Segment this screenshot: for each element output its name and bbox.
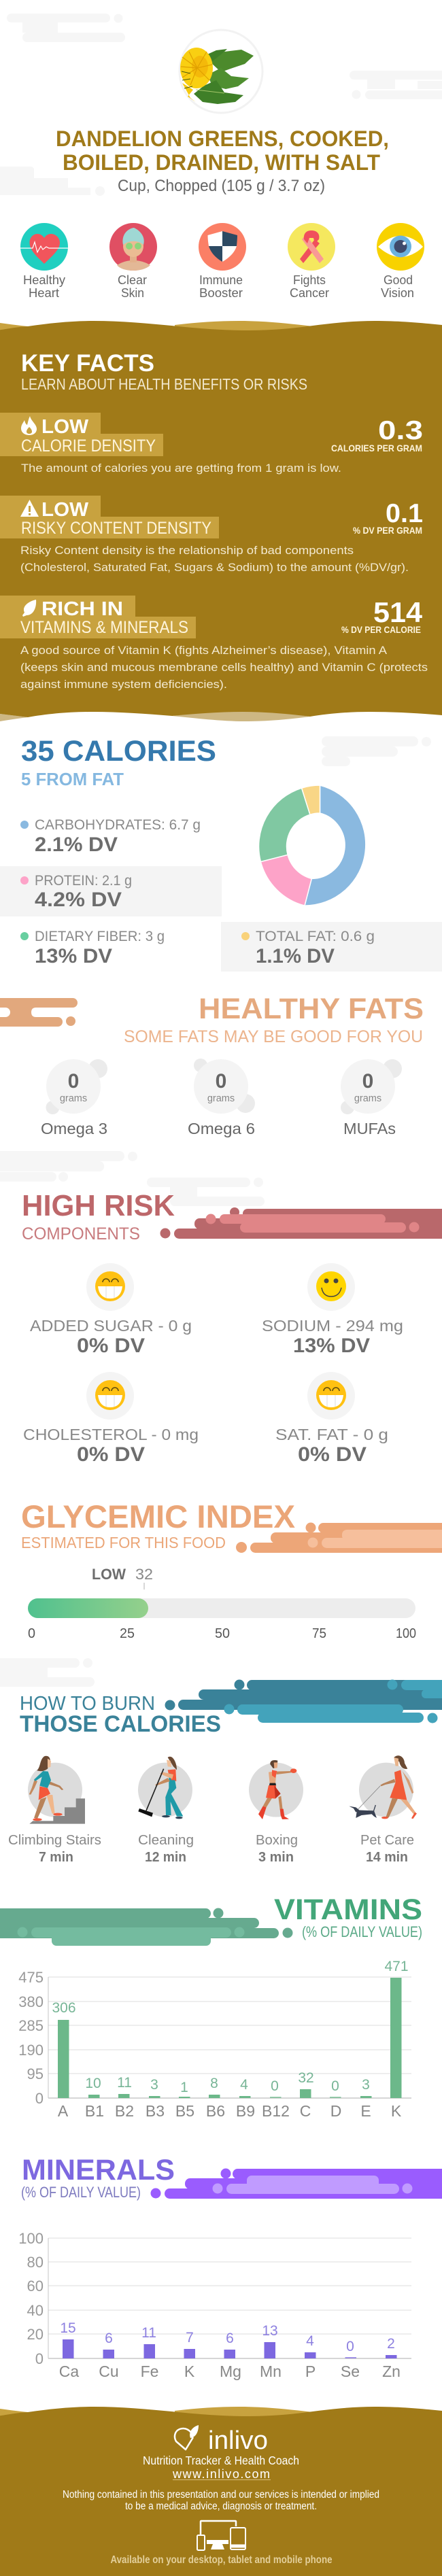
stat: omega 3: 0: [68, 1070, 79, 1093]
icon: clear skin: [109, 223, 157, 271]
gauge: glycemic index: 0: [28, 1626, 35, 1641]
bar chart: minerals: 15: [60, 2320, 76, 2336]
bar chart: vitamins: D: [330, 2102, 341, 2120]
bar chart: vitamins: B9: [236, 2102, 255, 2120]
label: healthy heart: Healthy: [23, 273, 65, 287]
activity: pet care: [349, 1755, 417, 1865]
bar chart: minerals: 80: [27, 2254, 44, 2271]
fact: low risky content density: RISKY CONTENT DENSITY: [21, 519, 211, 538]
heading: healthy fats: [124, 993, 424, 1046]
label: immune booster: Booster: [199, 286, 243, 300]
stat: omega 6: Omega 6: [188, 1120, 255, 1137]
legend: protein: 4.2% DV: [35, 889, 122, 911]
heading: how to burn those calories: HOW TO BURN: [20, 1693, 155, 1715]
fact: low calorie density: CALORIES PER GRAM: [331, 443, 422, 453]
label: good vision: [381, 273, 414, 300]
legend: protein: [0, 866, 222, 916]
fact: low risky content density: Risky Content density is the relationship of bad components: [20, 544, 354, 557]
bar chart: vitamins: 32: [298, 2070, 314, 2086]
legend: total fat: 1.1% DV: [256, 945, 335, 967]
bar chart: vitamins: 0: [271, 2078, 279, 2094]
fact: rich in vitamins and minerals: VITAMINS & MINERALS: [20, 618, 188, 637]
bar chart: vitamins: B5: [175, 2102, 194, 2120]
bar chart: vitamins: [18, 1959, 411, 2120]
icon: flame: [21, 416, 37, 435]
fact: low risky content density: LOW: [41, 499, 89, 521]
gauge: glycemic index: 32: [135, 1566, 153, 1583]
label: clear skin: Clear: [118, 273, 147, 287]
bar chart: vitamins: B6: [206, 2102, 225, 2120]
stat: omega 3: grams: [60, 1093, 87, 1104]
bar chart: vitamins: 11: [117, 2075, 132, 2091]
heading: high risk components: HIGH RISK: [22, 1189, 175, 1222]
risk: saturated fat: SAT. FAT - 0 g: [275, 1426, 388, 1443]
title: DANDELION GREENS, COOKED,: [56, 126, 389, 151]
heading: minerals: (% OF DAILY VALUE): [21, 2184, 141, 2201]
donut chart: calorie sources: [259, 785, 366, 906]
legend: dietary fiber: DIETARY FIBER: 3 g: [35, 929, 165, 944]
gauge: glycemic index: 25: [120, 1626, 135, 1641]
gauge: glycemic index: 75: [312, 1626, 326, 1641]
bar chart: vitamins: 4: [240, 2077, 248, 2093]
bar chart: minerals: Fe: [141, 2363, 158, 2380]
availability note: Available on your desktop, tablet and mobile phone: [110, 2554, 333, 2566]
fact: rich in vitamins and minerals: (keeps skin and mucous membrane cells healthy) and Vitamin C (protects: [20, 661, 428, 674]
gauge: glycemic index: LOW: [92, 1566, 126, 1583]
heading: healthy fats: SOME FATS MAY BE GOOD FOR YOU: [124, 1027, 423, 1046]
bar chart: minerals: 100: [18, 2230, 44, 2247]
stat: mufas: 0: [362, 1070, 373, 1093]
icon: fights cancer: [288, 223, 335, 271]
risk: sodium: [262, 1263, 403, 1357]
legend: dietary fiber: [20, 929, 165, 967]
bar chart: vitamins: B2: [115, 2102, 134, 2120]
fact: rich in vitamins and minerals: [0, 596, 428, 691]
activity: cleaning: [138, 1757, 194, 1865]
legend: dietary fiber: 13% DV: [35, 945, 112, 967]
stat: omega 6: 0: [216, 1070, 226, 1093]
heading: calories: 35 CALORIES: [21, 735, 216, 768]
risk: saturated fat: 0% DV: [298, 1443, 367, 1466]
bar chart: minerals: 4: [306, 2333, 314, 2349]
bar chart: minerals: 20: [27, 2326, 44, 2343]
fact: low calorie density: The amount of calories you are getting from 1 gram is low.: [21, 462, 341, 475]
fact: low calorie density: LOW: [41, 416, 89, 438]
stat: mufas: MUFAs: [343, 1120, 396, 1137]
legend: protein: PROTEIN: 2.1 g: [35, 873, 132, 889]
heading: minerals: [21, 2154, 175, 2201]
label: immune booster: [199, 273, 243, 300]
risk: added sugar: ADDED SUGAR - 0 g: [30, 1317, 192, 1335]
bar chart: vitamins: 10: [85, 2076, 101, 2091]
bar chart: minerals: Se: [341, 2363, 360, 2380]
bar chart: vitamins: 0: [35, 2090, 44, 2107]
tagline: Nutrition Tracker & Health Coach: [143, 2454, 299, 2467]
legend: total fat: TOTAL FAT: 0.6 g: [256, 929, 375, 944]
bar chart: minerals: Mn: [260, 2363, 282, 2380]
heading: high risk components: [22, 1189, 175, 1243]
label: fights cancer: Cancer: [290, 286, 329, 300]
panel: footer: [0, 2407, 442, 2576]
bar chart: vitamins: 1: [180, 2080, 188, 2095]
bar chart: vitamins: B12: [262, 2102, 290, 2120]
disclaimer: [63, 2489, 379, 2512]
bar chart: minerals: 6: [226, 2331, 234, 2346]
bar chart: minerals: 0: [35, 2350, 44, 2367]
activity: pet care: Pet Care: [360, 1833, 414, 1848]
bar chart: vitamins: 3: [150, 2077, 158, 2093]
fact: low risky content density: (Cholesterol, Saturated Fat, Sugars & Sodium) to the amount (%DV/gr).: [20, 561, 409, 574]
disclaimer: to be a medical advice, diagnosis or treatment.: [125, 2501, 317, 2512]
bar chart: vitamins: 95: [27, 2065, 44, 2082]
activity: climbing stairs: 7 min: [39, 1850, 73, 1865]
activity: pet care: 14 min: [366, 1850, 408, 1865]
label: clear skin: [118, 273, 147, 300]
title: [56, 126, 389, 175]
stat: omega 3: Omega 3: [41, 1120, 107, 1137]
icon: warning triangle: [20, 500, 39, 517]
stat: omega 6: grams: [207, 1093, 235, 1104]
activity: cleaning: Cleaning: [138, 1833, 194, 1848]
heading: glycemic index: ESTIMATED FOR THIS FOOD: [21, 1534, 226, 1551]
bar chart: vitamins: E: [360, 2102, 371, 2120]
icon: leaf: [22, 600, 36, 617]
risk: added sugar: [30, 1263, 192, 1357]
bar chart: minerals: 60: [27, 2278, 44, 2295]
bar chart: minerals: 0: [346, 2339, 354, 2354]
bar chart: vitamins: 471: [384, 1959, 409, 1974]
fact: low risky content density: % DV PER GRAM: [353, 525, 422, 536]
risk: sodium: 13% DV: [293, 1335, 370, 1357]
icon: devices: [197, 2521, 245, 2550]
heading: high risk components: COMPONENTS: [22, 1224, 140, 1243]
legend: carbohydrates: [20, 817, 201, 856]
heading: key facts: KEY FACTS: [21, 350, 154, 377]
bar chart: vitamins: 190: [18, 2042, 44, 2059]
bar chart: minerals: 2: [387, 2336, 395, 2352]
bar chart: vitamins: 3: [362, 2077, 370, 2093]
legend: carbohydrates: 2.1% DV: [35, 834, 118, 856]
food image: dandelion greens: [180, 30, 262, 113]
logo: inlivo: [175, 2425, 268, 2455]
serving size: Cup, Chopped (105 g / 3.7 oz): [118, 177, 325, 195]
heading: calories: 5 FROM FAT: [21, 769, 124, 789]
fact: rich in vitamins and minerals: 514: [373, 596, 423, 628]
label: fights cancer: [290, 273, 329, 300]
bar chart: minerals: 40: [27, 2302, 44, 2319]
bar chart: minerals: Ca: [59, 2363, 79, 2380]
bar chart: minerals: 7: [186, 2330, 194, 2346]
bar chart: minerals: P: [305, 2363, 316, 2380]
activity: climbing stairs: Climbing Stairs: [8, 1833, 101, 1848]
fact: low calorie density: CALORIE DENSITY: [21, 436, 156, 456]
bar chart: vitamins: 0: [331, 2078, 339, 2094]
heading: glycemic index: [21, 1498, 295, 1551]
bar chart: vitamins: B3: [146, 2102, 165, 2120]
legend: total fat: [221, 922, 442, 972]
bar chart: vitamins: 285: [18, 2017, 44, 2034]
bar chart: minerals: 6: [105, 2331, 113, 2346]
icon: immune booster: [199, 223, 246, 271]
heading: key facts: LEARN ABOUT HEALTH BENEFITS OR RISKS: [21, 375, 307, 393]
heading: how to burn those calories: [20, 1693, 221, 1737]
website link: www.inlivo.com: [172, 2467, 270, 2481]
fact: rich in vitamins and minerals: RICH IN: [41, 598, 123, 620]
heading: vitamins: VITAMINS: [274, 1893, 422, 1926]
label: healthy heart: Heart: [29, 286, 59, 300]
risk: saturated fat: [275, 1372, 388, 1466]
icon: good vision: [377, 223, 424, 271]
bar chart: vitamins: B1: [85, 2102, 104, 2120]
heading: vitamins: [274, 1893, 422, 1940]
disclaimer: Nothing contained in this presentation and our services is intended or implied: [63, 2489, 379, 2501]
heading: key facts: [21, 350, 307, 393]
heading: healthy fats: HEALTHY FATS: [199, 993, 424, 1025]
fact: low risky content density: 0.1: [386, 499, 423, 528]
bar chart: vitamins: K: [391, 2102, 402, 2120]
fact: rich in vitamins and minerals: % DV PER CALORIE: [341, 624, 421, 635]
activity: cleaning: 12 min: [145, 1850, 186, 1865]
risk: cholesterol: [23, 1372, 199, 1466]
bar chart: vitamins: 380: [18, 1993, 44, 2010]
risk: cholesterol: 0% DV: [77, 1443, 145, 1466]
bar chart: vitamins: 306: [52, 2000, 76, 2016]
risk: added sugar: 0% DV: [77, 1335, 145, 1357]
gauge: glycemic index: 50: [215, 1626, 230, 1641]
fact: rich in vitamins and minerals: against immune system deficiencies).: [20, 678, 227, 691]
label: fights cancer: Fights: [293, 273, 326, 287]
activity: boxing: 3 min: [258, 1850, 294, 1865]
label: good vision: Good: [384, 273, 413, 287]
activity: boxing: Boxing: [256, 1833, 298, 1848]
bar chart: minerals: Mg: [220, 2363, 241, 2380]
stat: omega 6: [188, 1059, 255, 1137]
label: good vision: Vision: [381, 286, 414, 300]
bar chart: minerals: [18, 2230, 411, 2380]
risk: cholesterol: CHOLESTEROL - 0 mg: [23, 1426, 199, 1443]
heading: calories: [21, 735, 216, 789]
heading: how to burn those calories: THOSE CALORIES: [20, 1711, 221, 1737]
panel: key facts: [0, 321, 442, 721]
stat: omega 3: [41, 1059, 107, 1137]
title: BOILED, DRAINED, WITH SALT: [63, 150, 380, 175]
risk: sodium: SODIUM - 294 mg: [262, 1317, 403, 1335]
activity: climbing stairs: [8, 1756, 101, 1865]
bar chart: minerals: Cu: [99, 2363, 119, 2380]
bar chart: minerals: 13: [262, 2323, 278, 2339]
bar chart: vitamins: 8: [210, 2076, 218, 2091]
stat: mufas: [341, 1059, 402, 1137]
label: healthy heart: [23, 273, 65, 300]
fact: low calorie density: [0, 413, 423, 475]
fact: low calorie density: 0.3: [378, 416, 423, 445]
label: clear skin: Skin: [121, 286, 144, 300]
heading: glycemic index: GLYCEMIC INDEX: [21, 1498, 295, 1534]
fact: low risky content density: [0, 496, 423, 574]
icon: healthy heart: [20, 223, 68, 271]
heading: minerals: MINERALS: [22, 2154, 175, 2186]
label: immune booster: Immune: [199, 273, 243, 287]
bar chart: vitamins: C: [300, 2102, 311, 2120]
bar chart: minerals: Zn: [382, 2363, 401, 2380]
gauge: glycemic index: 100: [396, 1626, 416, 1641]
bar chart: vitamins: A: [58, 2102, 69, 2120]
bar chart: minerals: 11: [141, 2325, 156, 2341]
bar chart: minerals: K: [184, 2363, 195, 2380]
logo: inlivo: inlivo: [208, 2426, 268, 2455]
gauge: glycemic index: [28, 1566, 416, 1641]
fact: rich in vitamins and minerals: A good source of Vitamin K (fights Alzheimer’s disease), Vitamin A: [20, 644, 388, 657]
activity: boxing: [249, 1760, 303, 1865]
stat: mufas: grams: [354, 1093, 381, 1104]
legend: carbohydrates: CARBOHYDRATES: 6.7 g: [35, 817, 201, 833]
bar chart: vitamins: 475: [18, 1969, 44, 1986]
